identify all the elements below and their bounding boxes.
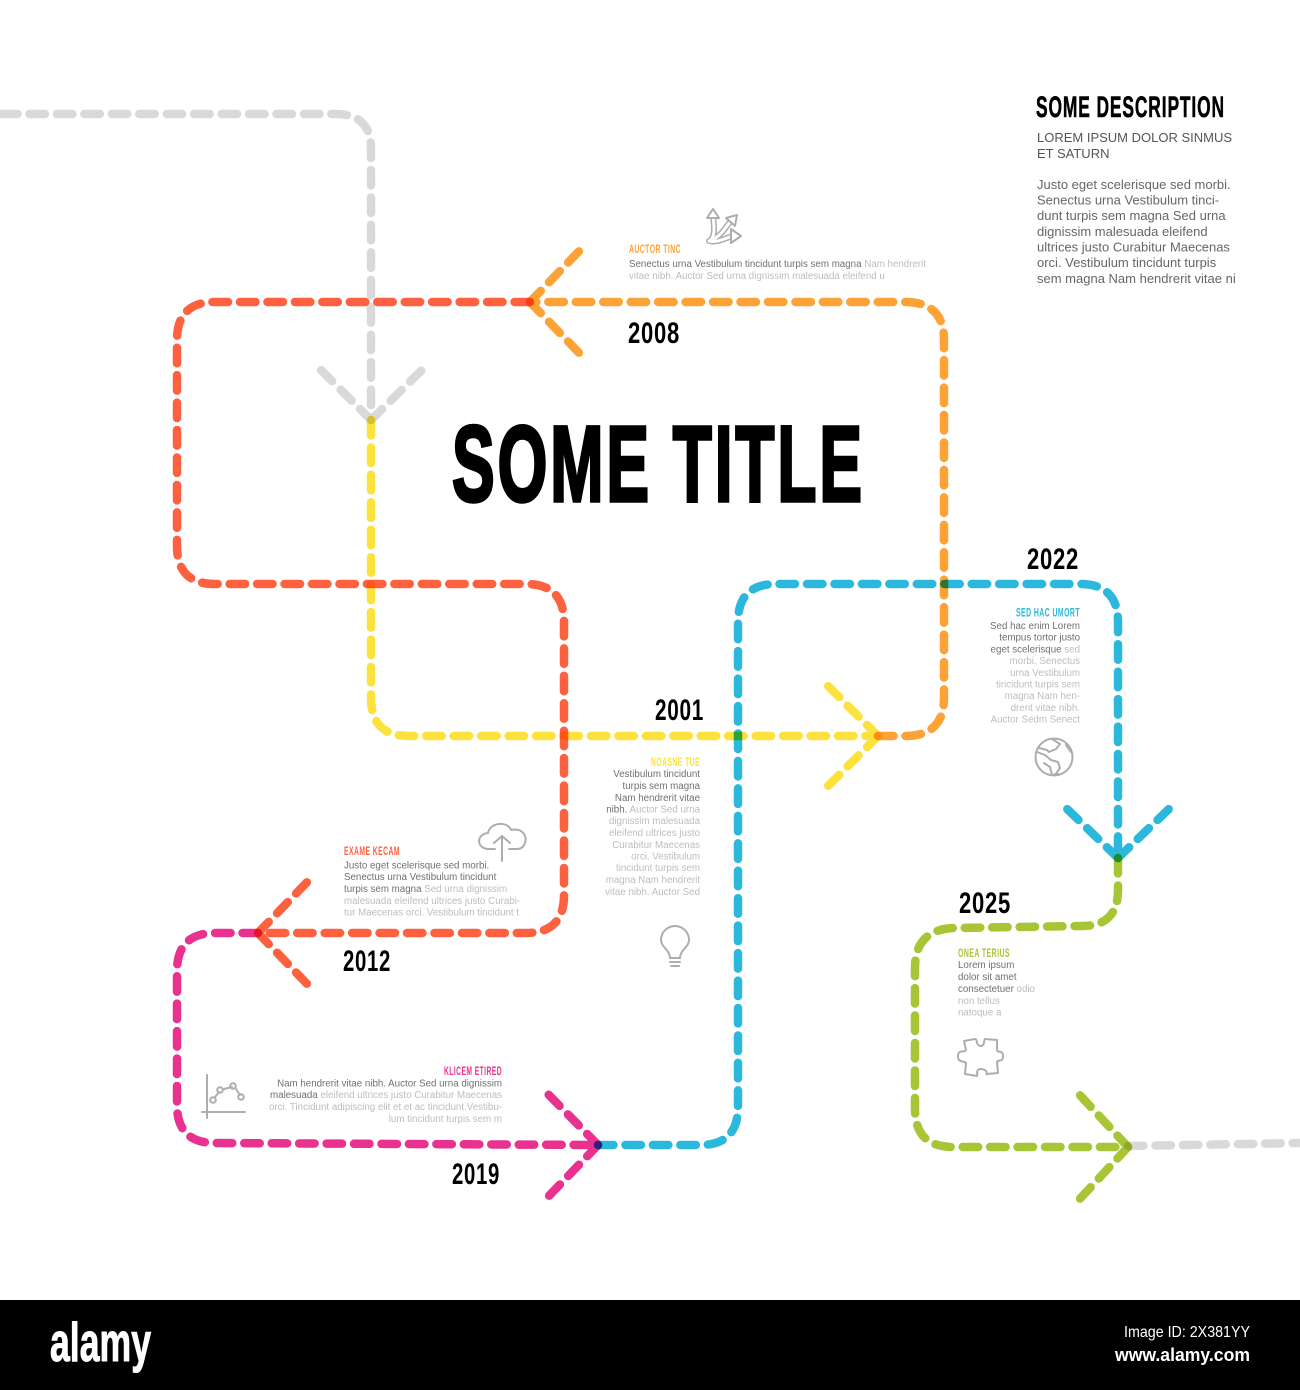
text block 2025: natoque a: [958, 1008, 1002, 1018]
footer bar: [0, 1300, 1300, 1390]
year 2025: 2025: [959, 887, 1011, 920]
text block 2012: Justo eget scelerisque sed morbi.: [344, 860, 489, 872]
year 2001: 2001: [655, 694, 704, 727]
text block 2001: Curabitur Maecenas: [612, 840, 700, 851]
text block 2001: orci. Vestibulum: [631, 852, 700, 862]
description body: Justo eget scelerisque sed morbi.: [1037, 177, 1231, 192]
description body: [1037, 177, 1236, 286]
timeline path: orange 2008: [530, 246, 944, 736]
text block 2025: Lorem ipsum: [958, 960, 1014, 971]
text block 2012: turpis sem magna Sed urna dignissim: [344, 884, 507, 895]
text block 2019: [269, 1078, 502, 1125]
icon: cloud upload: [479, 824, 526, 861]
year 2022: 2022: [1027, 543, 1079, 576]
description subtitle: LOREM IPSUM DOLOR SINMUS: [1037, 130, 1232, 145]
text block 2012: malesuada eleifend ultrices justo Curabi-: [344, 896, 520, 907]
text block 2019: lum tincidunt turpis sem m: [389, 1114, 502, 1125]
text block 2022: magna Nam hen-: [1005, 691, 1080, 702]
panel: 2025: [958, 887, 1036, 1076]
text block 2025: [958, 960, 1036, 1018]
text block 2012: Senectus urna Vestibulum tincidunt: [344, 872, 497, 883]
heading Noasne Tue: NOASNE TUE: [651, 755, 700, 769]
text block 2012: [344, 860, 520, 918]
text block 2022: tempus tortor justo: [999, 633, 1081, 644]
description body: sem magna Nam hendrerit vitae ni: [1037, 271, 1236, 286]
text block 2019: orci. Tincidunt adipiscing elit et et ac tincidunt.Vestibu-: [269, 1102, 502, 1113]
timeline path: red 2012: [177, 302, 564, 989]
text block 2001: [605, 769, 701, 898]
heading Onea Terius: ONEA TERIUS: [958, 946, 1010, 960]
heading Auctor Tinc: AUCTOR TINC: [629, 242, 681, 256]
text block 2022: urna Vestibulum: [1010, 668, 1080, 679]
text block 2022: [990, 621, 1081, 726]
text block 2001: vitae nibh. Auctor Sed: [605, 887, 700, 898]
description body: Senectus urna Vestibulum tinci-: [1037, 192, 1219, 208]
panel: 2012: [343, 824, 526, 978]
text block 2001: dignissim malesuada: [609, 816, 701, 827]
description body: dunt turpis sem magna Sed urna: [1037, 208, 1226, 223]
text block 2022: Sed hac enim Lorem: [990, 621, 1080, 632]
title: SOME TITLE: [452, 403, 865, 524]
heading Exame Kecam: EXAME KECAM: [344, 844, 400, 858]
footer image id: Image ID: 2X381YY: [1124, 1324, 1250, 1341]
text block 2008: vitae nibh. Auctor Sed urna dignissim malesuada eleifend u: [629, 271, 885, 282]
description subtitle: [1037, 130, 1232, 161]
description body: ultrices justo Curabitur Maecenas: [1037, 240, 1230, 254]
text block 2022: drerit vitae nibh.: [1011, 703, 1080, 714]
text block 2025: dolor sit amet: [958, 972, 1017, 983]
text block 2001: turpis sem magna: [622, 781, 701, 792]
timeline path: green 2025: [915, 858, 1128, 1203]
text block 2019: Nam hendrerit vitae nibh. Auctor Sed urna dignissim: [277, 1078, 502, 1090]
icon: puzzle piece: [958, 1039, 1003, 1076]
timeline path: gray end: [1128, 1143, 1300, 1146]
text block 2025: non tellus: [958, 996, 1000, 1007]
footer url: www.alamy.com: [1114, 1345, 1250, 1365]
text block 2019: malesuada eleifend ultrices justo Curabitur Maecenas: [270, 1090, 502, 1101]
year 2008: 2008: [628, 317, 680, 350]
panel: 2001: [605, 694, 704, 966]
description body: orci. Vestibulum tincidunt turpis: [1037, 255, 1217, 270]
text block 2025: consectetuer odio: [958, 984, 1036, 995]
panel: 2019: [202, 1064, 502, 1191]
text block 2001: Vestibulum tincidunt: [613, 769, 700, 780]
icon: line chart: [202, 1075, 245, 1118]
text block 2008: [629, 259, 926, 282]
year 2012: 2012: [343, 945, 391, 978]
text block 2001: eleifend ultrices justo: [609, 828, 701, 839]
panel: 2022: [990, 543, 1081, 776]
timeline path: magenta 2019: [177, 933, 598, 1201]
icon: globe: [1036, 738, 1072, 776]
panel: 2008: [628, 209, 926, 350]
heading Sed Hac Umort: SED HAC UMORT: [1016, 606, 1080, 620]
text block 2022: tincidunt turpis sem: [996, 680, 1080, 690]
text block 2022: morbi. Senectus: [1010, 656, 1080, 667]
description subtitle: ET SATURN: [1037, 146, 1109, 161]
text block 2008: Senectus urna Vestibulum tincidunt turpis sem magna Nam hendrerit: [629, 259, 926, 270]
year 2019: 2019: [452, 1158, 500, 1191]
text block 2012: tur Maecenas orci. Vestibulum tincidunt t: [344, 908, 519, 918]
timeline path: yellow 2001: [371, 420, 878, 792]
text block 2001: Nam hendrerit vitae: [615, 793, 700, 804]
timeline path: blue 2022: [598, 584, 1174, 1145]
text block 2022: eget scelerisque sed: [991, 644, 1080, 655]
text block 2001: nibh. Auctor Sed urna: [606, 804, 701, 816]
text block 2022: Auctor Sedm Senect: [991, 715, 1080, 726]
panel: description: [1036, 91, 1236, 286]
heading Klicem Etired: KLICEM ETIRED: [444, 1064, 502, 1078]
text block 2001: tincidunt turpis sem: [616, 863, 700, 874]
icon: light bulb: [661, 926, 689, 966]
text block 2001: magna Nam hendrerit: [606, 875, 700, 886]
description body: dignissim malesuada eleifend: [1037, 224, 1208, 239]
icon: split arrows: [707, 209, 741, 243]
footer logo: alamy: [50, 1311, 151, 1373]
timeline path: gray start: [2, 114, 427, 420]
